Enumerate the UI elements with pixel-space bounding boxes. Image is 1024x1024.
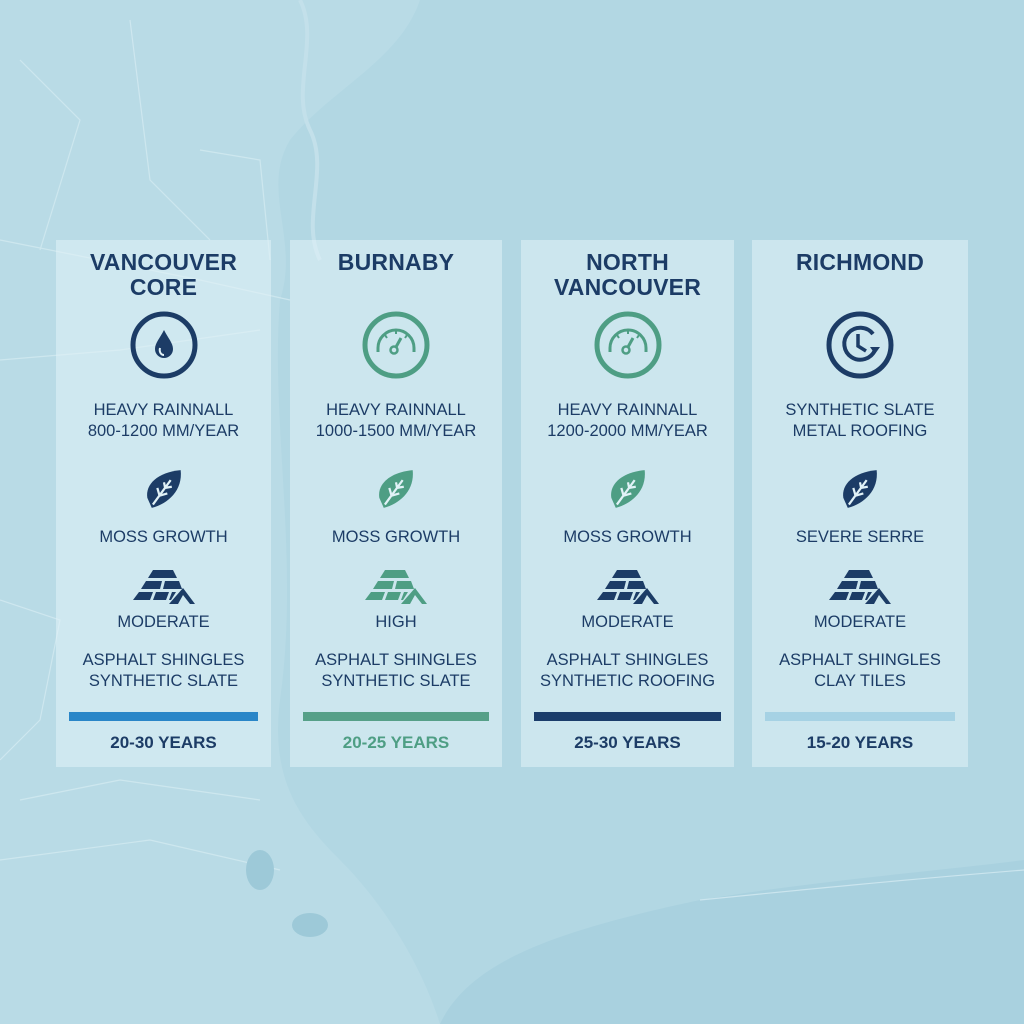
rainfall text [88,401,239,440]
rainfall text: 800-1200 MM/YEAR [88,422,239,440]
title [90,249,237,300]
severity text: SEVERE SERRE [796,528,924,546]
rainfall text: 1000-1500 MM/YEAR [316,422,476,440]
moss text: MOSS GROWTH [99,528,228,546]
materials [82,651,244,690]
icon: roof [597,570,659,604]
materials [315,651,477,690]
lifespan bar [69,712,258,721]
lifespan bar [534,712,721,721]
icon: gauge [362,312,430,378]
icon: leaf [843,470,877,508]
materials: SYNTHETIC SLATE [89,672,238,690]
moss text: MOSS GROWTH [332,528,460,546]
title: VANCOUVER [554,274,701,300]
lifespan: 15-20 YEARS [807,733,913,752]
materials text: METAL ROOFING [793,422,927,440]
icon: leaf [611,470,645,508]
materials text [785,401,935,440]
level: HIGH [375,613,417,631]
materials: ASPHALT SHINGLES [547,651,708,669]
materials [540,651,715,690]
materials: ASPHALT SHINGLES [83,651,244,669]
rainfall text: HEAVY RAINNALL [558,401,697,419]
icon: roof [365,570,427,604]
panel: North Vancouver [521,240,734,767]
icon: water drop [130,312,198,378]
lifespan bar [303,712,489,721]
materials: ASPHALT SHINGLES [315,651,477,669]
rainfall text: 1200-2000 MM/YEAR [547,422,708,440]
lifespan: 25-30 YEARS [574,733,681,752]
rainfall text [316,401,476,440]
title: CORE [130,274,197,300]
rainfall text: HEAVY RAINNALL [94,401,233,419]
panel: Richmond [752,240,968,767]
level: MODERATE [814,613,906,631]
materials [779,651,941,690]
icon: roof [133,570,195,604]
materials text: SYNTHETIC SLATE [785,401,935,419]
panel: Burnaby [290,240,502,767]
materials: SYNTHETIC ROOFING [540,672,715,690]
lifespan bar [765,712,955,721]
moss text: MOSS GROWTH [563,528,692,546]
materials: ASPHALT SHINGLES [779,651,941,669]
title: RICHMOND [796,249,924,275]
icon: leaf [379,470,413,508]
panel: Vancouver Core [56,240,271,767]
lifespan: 20-30 YEARS [110,733,217,752]
title: NORTH [586,249,669,275]
rainfall text [547,401,708,440]
title: BURNABY [338,249,454,275]
level: MODERATE [581,613,674,631]
materials: SYNTHETIC SLATE [321,672,471,690]
materials: CLAY TILES [814,672,906,690]
icon: leaf [147,470,181,508]
title [554,249,701,300]
rainfall text: HEAVY RAINNALL [326,401,466,419]
icon: clock [826,312,894,378]
level: MODERATE [117,613,210,631]
icon: gauge [594,312,662,378]
title: VANCOUVER [90,249,237,275]
icon: roof [829,570,891,604]
lifespan: 20-25 YEARS [343,733,449,752]
